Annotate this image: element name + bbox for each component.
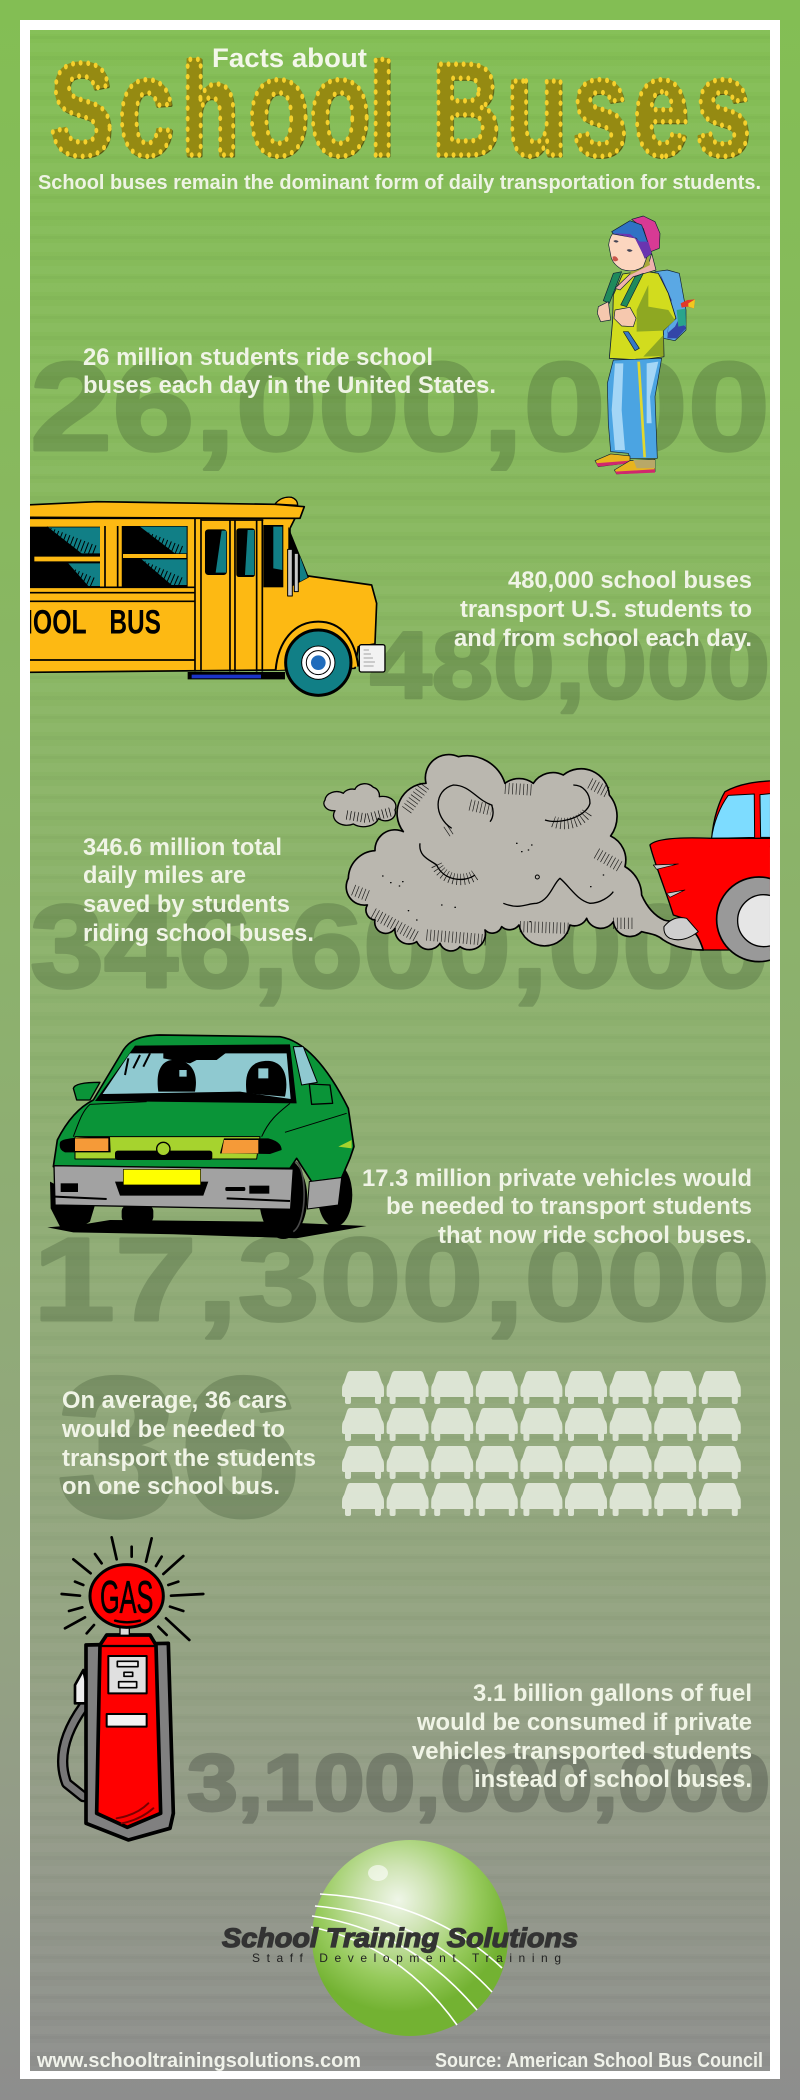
- large number: 17,300,000: 17,300,000: [33, 1214, 770, 1346]
- mirrors: [73, 1082, 100, 1100]
- white slot: [107, 1714, 147, 1727]
- step: [188, 672, 285, 679]
- large number: 480,000: 480,000: [370, 613, 770, 719]
- body text: 26 million: buses each day in the United States.: [83, 372, 496, 399]
- body text: 36 cars: transport the students: [62, 1445, 316, 1472]
- trousers: [607, 358, 662, 458]
- roof: [25, 502, 304, 518]
- body text: 36 cars: [61, 1387, 316, 1500]
- wheels: [50, 1158, 352, 1239]
- hose: [63, 1707, 83, 1797]
- logo: School Training Solutions: [222, 1840, 578, 2036]
- body text: 480,000: 480,000 school buses: [508, 567, 752, 594]
- illustration: exhaust cloud and red car: [324, 755, 800, 962]
- body text: 346.6 million: [83, 834, 314, 947]
- bumper and plate: [54, 1166, 342, 1209]
- title: School Buses: l: [369, 37, 395, 184]
- face: [609, 231, 648, 271]
- dial panel: [108, 1656, 147, 1693]
- footer: website: www.schooltrainingsolutions.com: [36, 2050, 361, 2072]
- title: School Buses: uses: [506, 29, 751, 185]
- title: School Buses: uses: [506, 29, 751, 185]
- title: School Buses: S: [50, 37, 113, 184]
- body text: 480,000: transport U.S. students to: [460, 596, 752, 623]
- title: School Buses: S: [50, 37, 113, 184]
- illustration: gas pump: [62, 1537, 203, 1840]
- door and pillars: [195, 518, 309, 672]
- big cloud: [346, 755, 703, 951]
- body text: 36 cars: would be needed to: [61, 1416, 285, 1443]
- body text: 3.1 billion: instead of school buses.: [474, 1766, 752, 1793]
- body text: 17.3 million: be needed to transport students: [386, 1193, 752, 1220]
- illustration: green car: [47, 1035, 367, 1239]
- body text: 17.3 million: that now ride school buses.: [438, 1222, 752, 1249]
- scarf and straps: [615, 253, 656, 290]
- lettering: [30, 610, 160, 634]
- icon grid: 36 cars: [342, 1371, 741, 1516]
- pump body: [86, 1643, 173, 1840]
- body text: 3.1 billion: vehicles transported students: [412, 1738, 752, 1765]
- rays: [62, 1537, 203, 1640]
- body text: 480,000: [454, 567, 752, 652]
- body text: 480,000: and from school each day.: [454, 625, 752, 652]
- bumper: [359, 645, 385, 672]
- footer: source: Source: American School Bus Council: [435, 2050, 763, 2072]
- globe: GAS: [100, 1571, 153, 1622]
- title: School Buses: [50, 29, 751, 185]
- title: School Buses: B: [432, 37, 501, 184]
- windows: [25, 526, 188, 587]
- logo: School Training Solutions: Staff Development Training: [252, 1951, 561, 1965]
- illustration: yellow school bus: [15, 497, 385, 695]
- body: [53, 1035, 354, 1182]
- title: School Buses: h: [181, 37, 239, 184]
- lettering: BUS: [109, 603, 161, 641]
- small puff: [324, 784, 396, 827]
- red car: [649, 780, 770, 962]
- subtitle: School buses remain the dominant form of daily transportation for students.: [38, 172, 761, 194]
- body text: 26 million: [83, 344, 496, 399]
- large number: 346,600,000: 346,600,000: [30, 881, 770, 1013]
- logo: School Training Solutions: School Training Solutions: [222, 1923, 578, 1953]
- title: School Buses: oo: [248, 29, 371, 185]
- body text: 36 cars: on one school bus.: [62, 1473, 280, 1500]
- body text: 346.6 million: 346.6 million total: [83, 834, 282, 861]
- body text: 17.3 million: 17.3 million private vehicles would: [362, 1165, 752, 1192]
- body text: 3.1 billion: 3.1 billion gallons of fuel: [473, 1680, 752, 1707]
- jacket: [609, 271, 676, 360]
- body text: 3.1 billion: [412, 1680, 752, 1793]
- body text: 3.1 billion: would be consumed if private: [416, 1709, 752, 1736]
- body text: 17.3 million: [362, 1165, 752, 1249]
- lettering: HOOL: [15, 603, 87, 641]
- large number: 36: 36: [56, 1336, 302, 1559]
- backpack: [655, 270, 695, 341]
- side stripes: [25, 587, 195, 660]
- roof lamp: [275, 497, 298, 505]
- body text: 346.6 million: riding school buses.: [83, 920, 314, 947]
- title: School Buses: c: [118, 29, 174, 185]
- body text: 26 million: 26 million students ride school: [83, 344, 433, 371]
- ground shadow: [47, 1220, 367, 1238]
- title: School Buses: l: [369, 37, 395, 184]
- windshield: [95, 1044, 317, 1103]
- title: School Buses: c: [118, 29, 174, 185]
- title: Facts about: Facts about: [212, 43, 367, 73]
- shoes: [595, 454, 630, 467]
- globe: [90, 1565, 163, 1635]
- hood line: [73, 1102, 347, 1137]
- near wheel highlight: [293, 1162, 304, 1232]
- large number: 3,100,000,000: 3,100,000,000: [187, 1738, 770, 1827]
- body text: 36 cars: On average, 36 cars: [62, 1387, 287, 1414]
- grille and lights: [60, 1137, 282, 1160]
- title: School Buses: B: [432, 37, 501, 184]
- body text: 346.6 million: daily miles are: [83, 862, 246, 889]
- bus body: [25, 518, 377, 672]
- hands: [597, 302, 636, 327]
- title: School Buses: oo: [248, 29, 371, 185]
- hat: [612, 216, 660, 258]
- body text: 346.6 million: saved by students: [83, 891, 290, 918]
- front wheel: [276, 622, 358, 695]
- title: School Buses: h: [181, 37, 239, 184]
- illustration: student with backpack: [595, 216, 695, 474]
- large number: 26,000,000: 26,000,000: [30, 336, 770, 477]
